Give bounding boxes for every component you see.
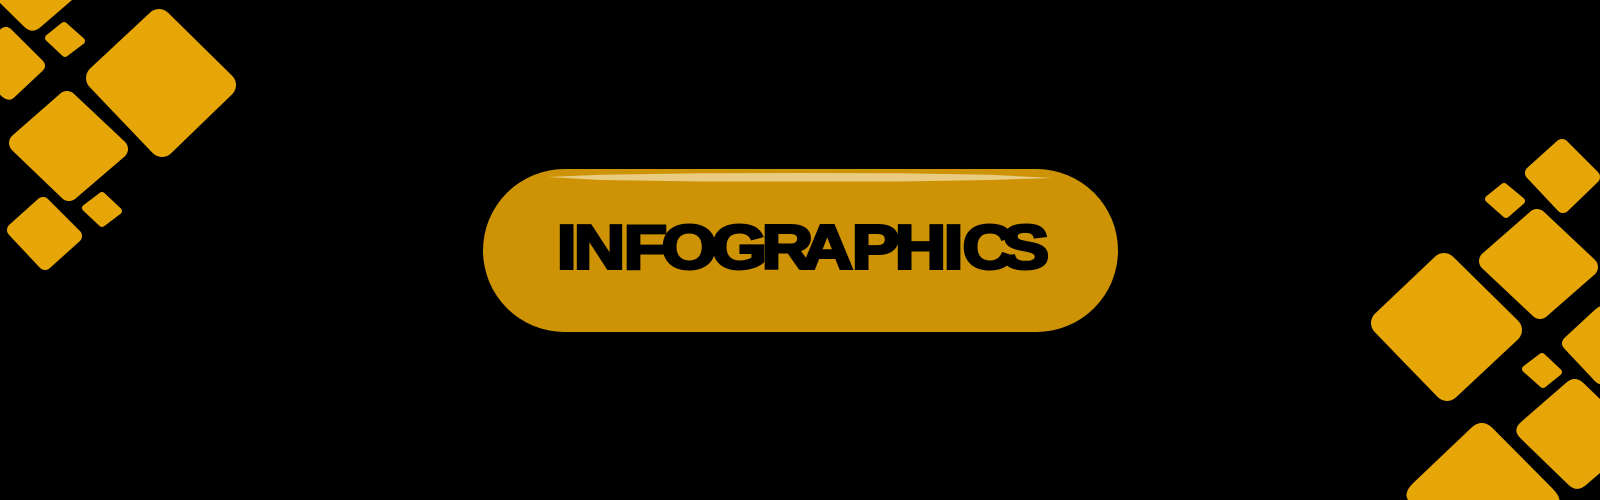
title pill <box>483 169 1118 332</box>
decorative diamonds: bottom right cluster <box>1384 146 1600 500</box>
decorative diamonds: top left cluster <box>0 0 223 263</box>
gloss highlight <box>548 173 1053 182</box>
title text: INFOGRAPHICS <box>557 214 1049 282</box>
